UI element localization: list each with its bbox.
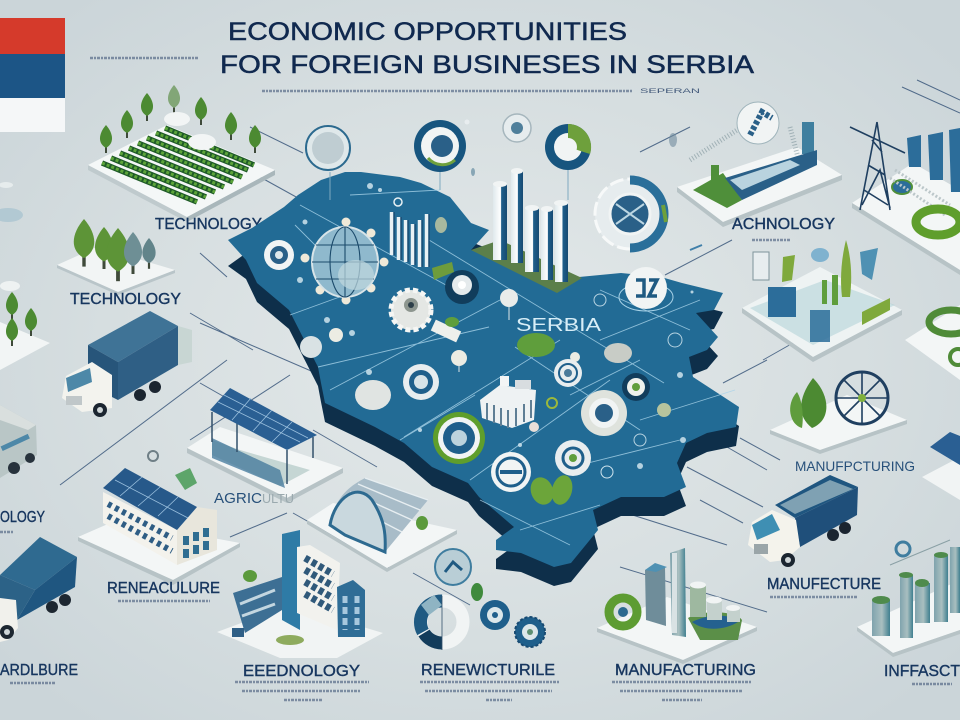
map icon: green flag: [432, 262, 454, 280]
map icon: pins and nodes: [300, 289, 671, 432]
map icon: central factory: [480, 376, 536, 428]
icon: tiny marks: [464, 120, 702, 250]
label: manufacturing right: MANUFPCTURING: [795, 458, 915, 474]
title: [220, 18, 754, 79]
icon: wheel and leaves plate: [770, 372, 907, 454]
map label: SERBIA: [516, 315, 601, 335]
icon: covered truck left: [0, 405, 37, 478]
map icon: ring logos: [403, 359, 650, 492]
icon: greenhouse plate: [742, 240, 902, 362]
label: technology: TECHNOLOGY: [155, 216, 262, 233]
label: reneaculure: RENEACULURE: [107, 580, 220, 597]
big bar chart on map: [471, 168, 582, 293]
icon: solar-roof building: [78, 468, 240, 585]
label: agriculture: [214, 490, 294, 507]
label: manufacturing bottom: MANUFACTURING: [615, 662, 756, 679]
map icon: gear: [391, 290, 431, 330]
connector lines: [60, 80, 960, 612]
small bar chart on map: [392, 198, 447, 267]
map circuit lines: [290, 190, 735, 545]
icon: badge above donut: [435, 549, 471, 585]
icon: glass dome building: [307, 478, 457, 572]
label: eeednology: EEEDNOLOGY: [243, 663, 360, 680]
icon: dump truck: [748, 475, 858, 567]
icon: orchard plate left: [0, 281, 50, 370]
icon: solar canopy: [187, 388, 343, 503]
map icon: logo circle east: [619, 267, 673, 311]
icon: green ring plate right: [905, 305, 960, 380]
icon: skyscraper plate: [857, 540, 960, 657]
icon: small leaf marks: [148, 451, 197, 490]
label: eeednology: [235, 663, 369, 700]
icon: city buildings: [217, 530, 383, 658]
icon: delivery truck: [62, 311, 192, 417]
icon: target dial: [595, 179, 666, 249]
icon: dotted globe badge: [306, 126, 350, 200]
icon: small badge: [503, 114, 531, 142]
icon: solar panel plate right: [922, 432, 960, 500]
map icon: leaves: [517, 333, 576, 508]
subtitle fine print: [90, 58, 700, 95]
top circle icons: [306, 114, 702, 250]
map icon: logo circle west: [264, 240, 294, 270]
icon: arrow badge: [414, 120, 466, 190]
map side extrusion: [228, 191, 739, 586]
label: renewicturile: RENEWICTURILE: [421, 662, 555, 679]
label: technology 2: TECHNOLOGY: [70, 291, 181, 308]
label: infrastructure: INFFASCT: [884, 663, 960, 680]
icon: pie badge: [545, 124, 591, 200]
icon: blue truck: [0, 537, 77, 642]
label: ardlbure: ARDLBURE: [0, 662, 78, 679]
icon: forest plate: [57, 219, 175, 295]
map small dots: [297, 183, 694, 469]
map top face: [228, 172, 739, 567]
Serbian flag: [0, 18, 65, 132]
title: FOR FOREIGN BUSINESES IN SERBIA: [220, 51, 754, 79]
icon: power tower plate: [850, 122, 960, 275]
label: agriculture: ULTU: [262, 491, 294, 506]
icon: crop field: [88, 85, 275, 222]
icon: manufacturing plate: [597, 548, 757, 664]
subtitle fine print: SEPERAN: [640, 89, 700, 95]
icon: small blue mark left edge: [0, 182, 23, 222]
icon: panel plate with callout: [677, 102, 842, 227]
label: -ology: [0, 509, 45, 532]
icon: gears: [471, 583, 545, 647]
label: manufacture: MANUFECTURE: [767, 576, 881, 593]
title: ECONOMIC OPPORTUNITIES: [228, 18, 627, 46]
globe: [300, 218, 388, 304]
label: manufacturing bottom: [612, 662, 756, 700]
label: agriculture: AGRIC: [214, 490, 262, 507]
map icon: dark dial: [445, 270, 479, 304]
label: achnology: ACHNOLOGY: [732, 216, 835, 233]
label: renewicturile: [420, 662, 560, 700]
label: -ology: OLOGY: [0, 509, 45, 526]
map of Serbia: [228, 168, 739, 586]
icon: donut chart: [420, 596, 463, 650]
